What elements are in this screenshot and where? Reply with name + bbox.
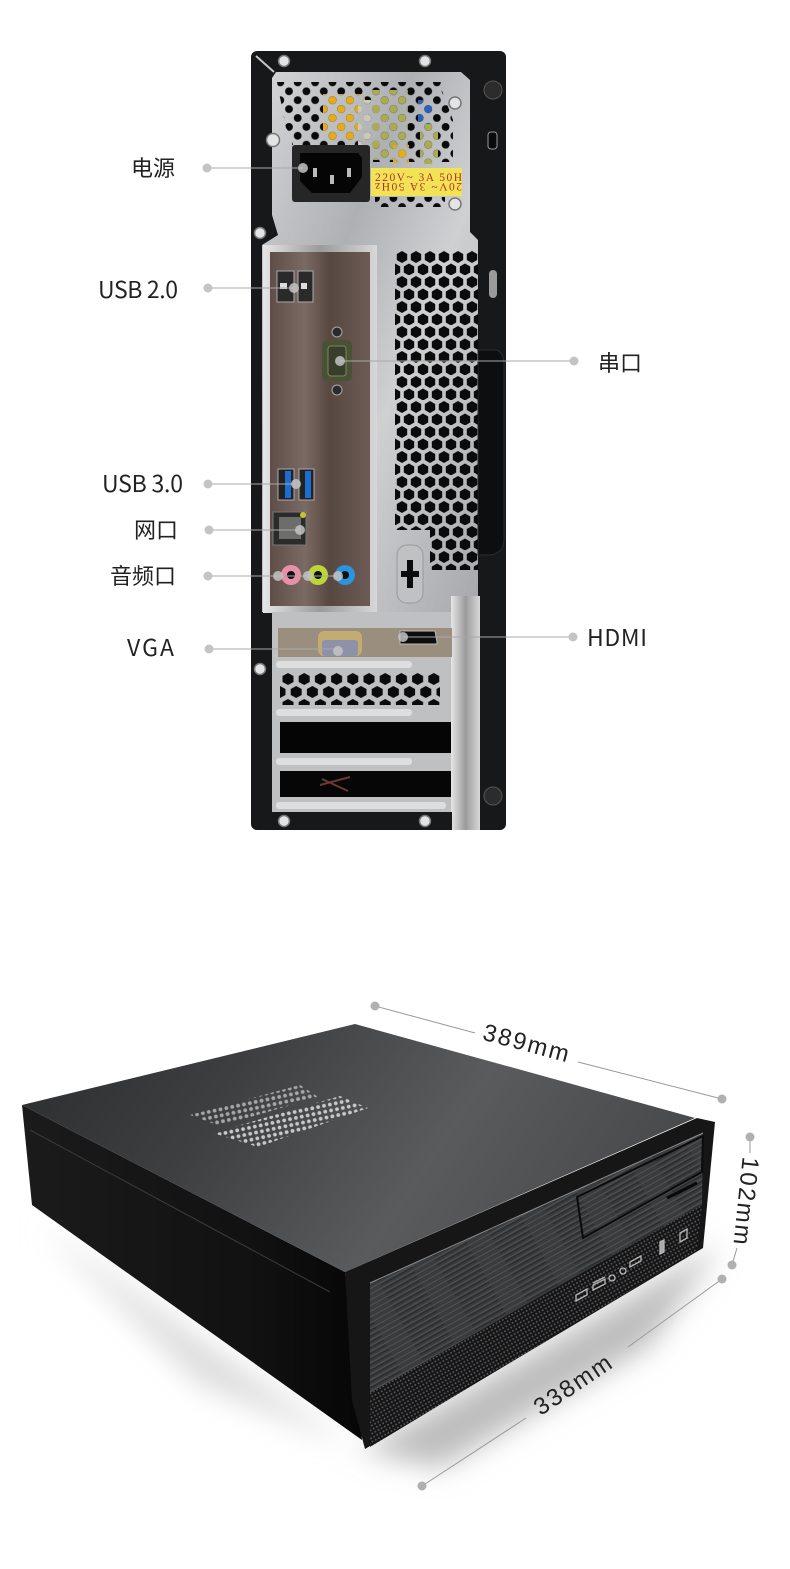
carbon mesh lower panel [370,1205,702,1447]
open slot 1 [280,722,451,753]
dimension: depth 389mm [370,1002,726,1104]
lid corner marks [330,1254,352,1258]
voltage label [371,168,462,196]
callout dots [202,163,578,656]
ethernet port [273,512,306,545]
lid [22,1024,695,1272]
panel: rear view of the computer case [251,51,506,830]
dimension: width 338mm: 338mm [529,1348,619,1421]
side panel edge line [30,1130,330,1292]
lid vent [190,1085,368,1147]
voltage label: 220V~ 3A 50H [375,172,462,184]
dimension: height 102mm [727,1132,764,1270]
power supply vent [277,82,453,207]
perforated bracket [280,672,440,705]
screws [254,56,461,674]
serial port [322,327,352,395]
left side panel [22,1105,362,1440]
voltage label: 20V~ 3A 50Hz [375,180,462,192]
dimension: height 102mm: 102mm [727,1156,764,1248]
open slot 2 [280,771,451,797]
plus shaped cutout [397,545,423,603]
front IO ports [576,1229,687,1301]
label: HDMI: HDMI [587,619,647,653]
USB 3.0 ports [278,469,314,500]
right side oval slot and handle [478,270,504,555]
security slot [488,132,497,149]
audio jacks [281,565,355,585]
metal plate [262,72,478,612]
thumb screws [484,81,502,805]
brushed front panel [370,1133,703,1393]
label: ethernet: 网口 [134,513,178,545]
panel: perspective view of the case [22,1024,720,1468]
IO shield [263,245,377,613]
wires in slot [320,777,350,791]
expansion slot area [272,596,480,830]
label: serial: 串口 [598,346,642,378]
front bezel [345,1118,715,1449]
label: USB 2.0: USB 2.0 [98,271,178,305]
side strip [451,596,480,830]
label: USB 3.0: USB 3.0 [102,465,183,499]
label: VGA: VGA [127,629,174,663]
front panel highlight [370,1133,703,1283]
rear chassis body [251,51,506,830]
shadow [40,1225,720,1468]
dimension: width 338mm [418,1274,726,1490]
USB 2.0 ports [277,271,313,302]
label: power: 电源 [131,151,175,183]
top-left corner highlight [256,56,274,72]
label: audio: 音频口 [110,559,176,591]
callout lines [207,168,574,649]
slot ribs [276,661,446,809]
main hexagon vent [395,250,478,570]
dimension: depth 389mm: 389mm [480,1019,574,1068]
power socket [292,145,370,202]
VGA and HDMI bracket [278,628,452,657]
optical drive bay [577,1136,703,1238]
